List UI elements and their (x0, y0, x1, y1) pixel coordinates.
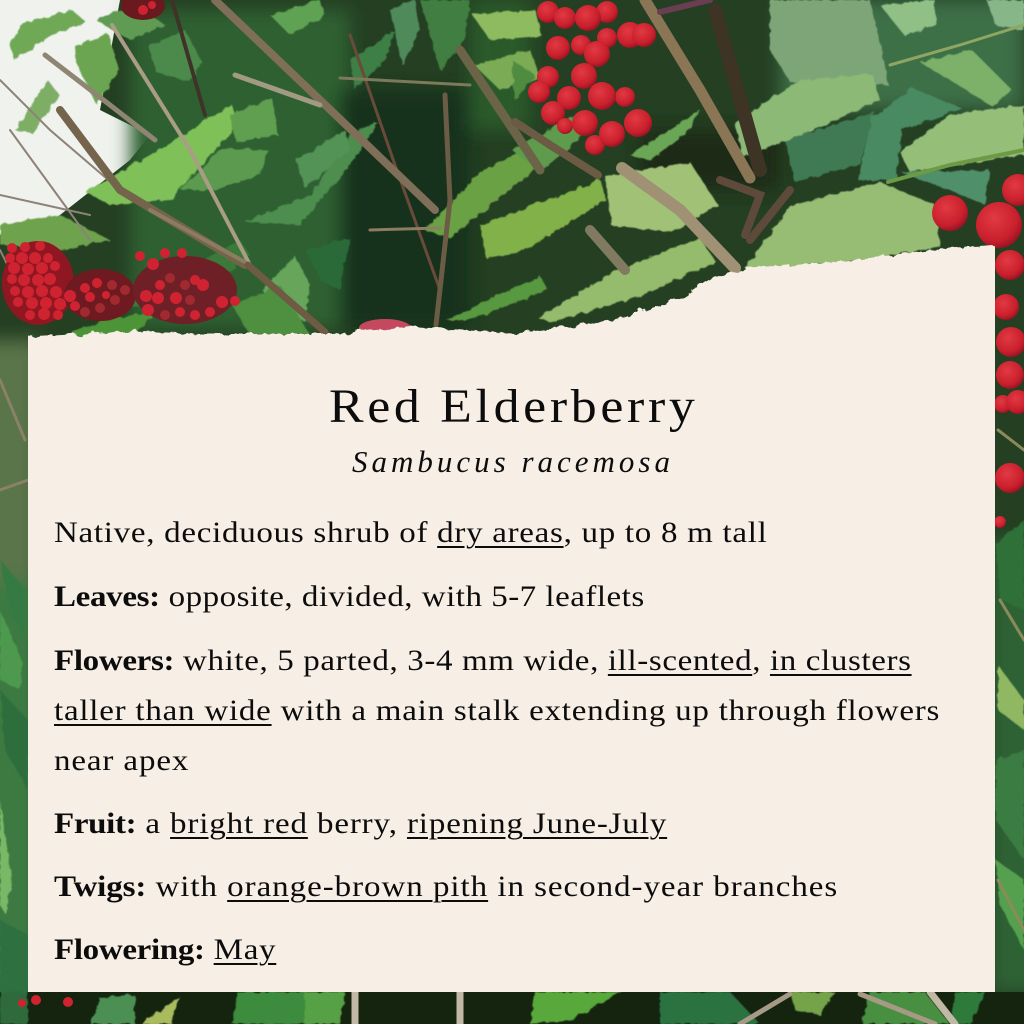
text: flowers (54, 644, 940, 777)
title: Red Elderberry (329, 380, 699, 433)
text: flowers: Flowers: white, 5 parted, 3-4 mm wide, ill-scented, in clusters (54, 644, 912, 677)
text: twigs: Twigs: with orange-brown pith in second-year branches (54, 870, 838, 903)
text: flowers: near apex (54, 744, 189, 777)
torn paper card (10, 243, 1010, 1010)
small berry clusters left (2, 0, 411, 1007)
bottom strip base (0, 992, 1024, 1024)
sky patch (0, 0, 150, 235)
scientific name: Sambucus racemosa (352, 444, 674, 479)
text: fruit: Fruit: a bright red berry, ripening June-July (54, 807, 667, 840)
text: leaves: Leaves: opposite, divided, with 5-7 leaflets (54, 580, 645, 613)
text: habit: Native, deciduous shrub of dry areas, up to 8 m tall (54, 516, 768, 549)
large berry cluster right (932, 174, 1024, 528)
large berry cluster top (528, 1, 656, 155)
text: flowering: Flowering: May (54, 933, 276, 966)
text: flowers: taller than wide with a main stalk extending up through flowers (54, 694, 940, 727)
